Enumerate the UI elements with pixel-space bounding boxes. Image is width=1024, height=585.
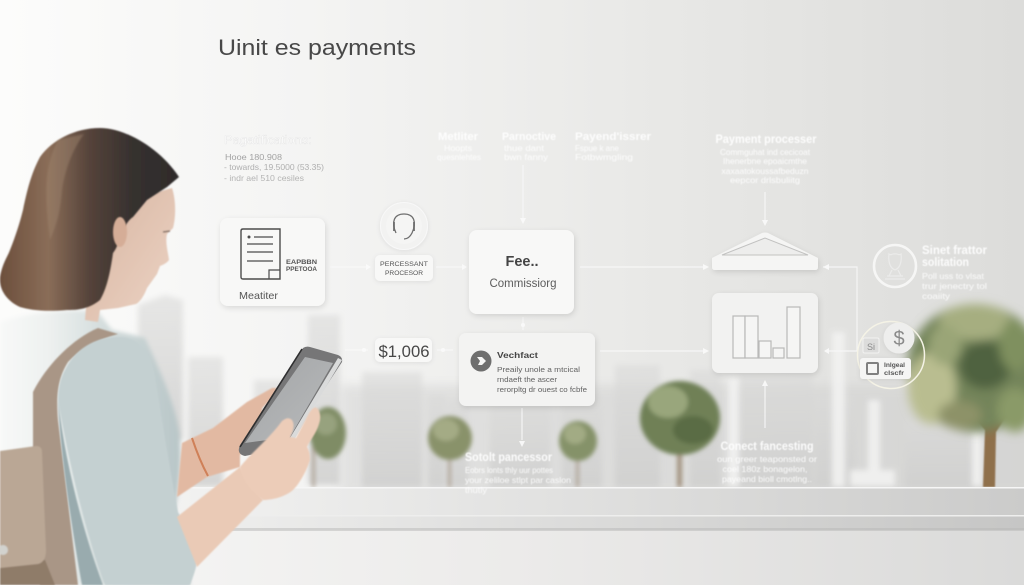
floor [0,530,1024,585]
text block: sinet fratter solitation: trur jenectry tol [922,281,987,291]
icon: document [241,229,280,279]
text block: payend issuer: Fotbwmgling [575,153,633,162]
forearm near [177,467,263,567]
text block: solot pancessor: thutly [465,485,488,495]
tree 1 [310,407,346,487]
ledge [176,487,1024,531]
text block: payment notes: - towards, 19.5000 (53.35) [224,162,324,172]
haze behind skyline [340,385,1024,495]
text block: parnoctive: Parnoctive [502,131,556,143]
text block: payend issuer: Fspue k ane [575,144,620,153]
text block: payment processor: Commguhat ind cecicoat [720,147,811,157]
icon: small receipt: Si [867,342,875,352]
icon: arrow badge [470,350,492,372]
icon label [286,259,317,273]
card: fee commission: Fee.. [506,254,538,270]
card: vechfact: rndaeft the ascer [497,375,558,384]
text block: sinet fratter solitation: solitation [922,257,969,269]
text block: conect fancesting: Conect fancesting [720,441,814,453]
bag strap [33,328,118,585]
label: digital chip: clscfr [884,371,905,377]
text block: sinet fratter solitation: coaiity [922,291,951,301]
text block: payment notes: Hooe 180.908 [225,152,282,162]
torso and shirt [0,310,190,585]
label: processor pill [375,255,433,281]
sleeve arm [58,337,198,585]
far hand and forearm [177,388,278,497]
label: digital chip [860,358,911,379]
icon: dollar coin: $ [893,328,905,350]
bag [0,446,55,585]
card: fee commission [469,230,574,314]
label: digital chip: Inlgeal [884,363,905,369]
icon: headset [380,202,428,250]
tree 3 [559,421,597,487]
text block: parnoctive: bwn fanny [504,153,548,162]
bracelet [192,438,208,476]
hair [0,128,179,311]
text block: conect fancesting: oun greer teaponsted or [717,454,817,464]
text block: conect fancesting: coel 180z bonagelon, [722,464,808,474]
text block: solot pancessor: your zeliloe stlpt par caslon [465,475,571,485]
text block: payment notes: - indr ael 510 cesiles [224,173,304,183]
blurred city skyline [138,295,975,487]
text block: sinet fratter solitation: Sinet frattor [922,245,988,257]
icon label: PPETOOA [286,266,317,273]
text block: payment processor: eepcor drlsbuliitg [730,175,800,185]
icon label: EAPBBN [286,259,317,266]
text block: parnoctive: thue dant [504,144,545,153]
label: processor pill: PROCESOR [385,270,423,277]
text block: solot pancessor: Sotolt pancessor [465,452,552,464]
icon: award circle [874,245,916,287]
connector lines and arrows [330,165,857,447]
card: vechfact: Preaily unole a mtcical [497,365,580,374]
phone [239,347,342,456]
card: vechfact: Vechfact [497,350,538,360]
text block: solot pancessor [465,452,571,495]
text block: mediator [437,131,481,162]
text block: payment notes: Pagatifications: [224,135,312,147]
text block: payend issuer [575,131,652,162]
tree 4 [640,381,720,487]
small trees [310,381,720,487]
text block: payment processor [716,134,817,185]
ear [113,217,127,247]
text block: payment notes [224,135,324,183]
hand front [240,407,320,500]
text block: conect fancesting [717,441,817,484]
text block: payment processor: Ihenerbne epoaicmthe [723,156,807,166]
text block: payment processor: Payment processer [716,134,817,146]
title: Uinit es payments [218,35,416,60]
tree 2 [428,416,472,487]
text block: conect fancesting: payeand bioll cmotlng.. [722,474,812,484]
payment circle group [858,322,924,388]
text block: payment processor: xaxaatokoussafbeduzn [722,166,809,176]
text block: payend issuer: Payend'issrer [575,131,652,143]
card: mediator: Meatiter [239,290,279,302]
text block: parnoctive [502,131,556,162]
label: processor pill: PERCESSANT [380,261,428,268]
card: vechfact [459,333,595,406]
text block: mediator: quesnlehtes [437,153,481,162]
neck and face [85,188,175,322]
text block: mediator: Metliter [438,131,479,143]
pale towers [728,332,982,487]
text block: mediator: Hoopts [444,144,472,153]
text block: sinet fratter solitation: Poll uss to vlsat [922,271,985,281]
card: mediator [220,218,325,306]
label: amount pill: $1,006 [378,342,430,361]
woman with phone [0,128,342,585]
card: vechfact: rerorpltg dr ouest co fcbfe [497,385,587,394]
large tree [907,304,1024,487]
card: bar chart [712,293,818,373]
text block: solot pancessor: Eobrs lonts thly uur pottes [465,465,553,475]
icon: roof shape [712,232,818,270]
text block: sinet fratter solitation [922,245,988,301]
card: fee commission: Commissiorg [490,278,556,290]
